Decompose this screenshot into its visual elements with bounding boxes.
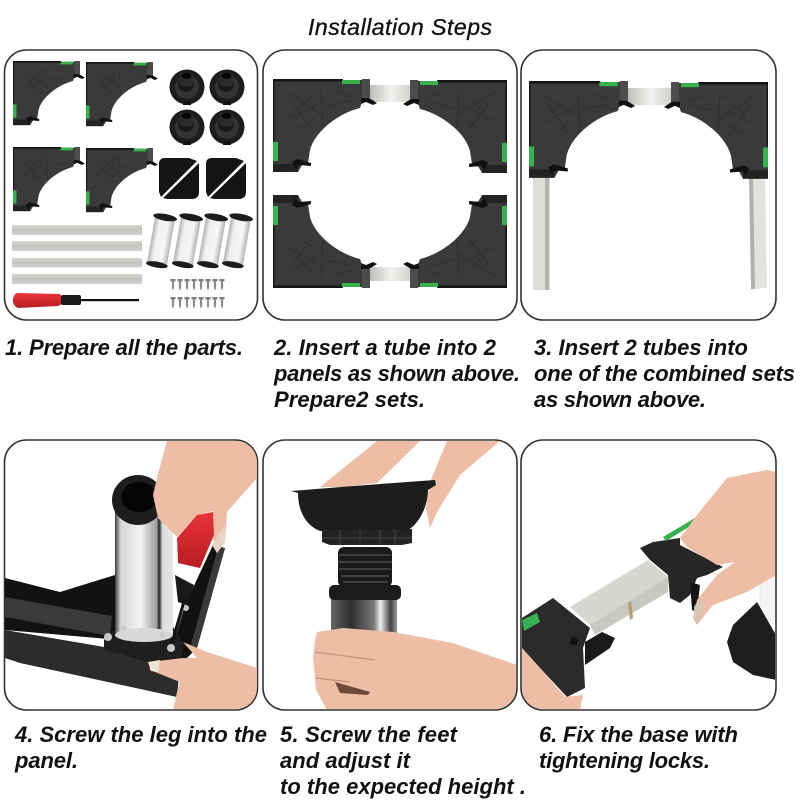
- collar and chrome tube: [329, 585, 401, 634]
- chrome tube: [112, 475, 173, 642]
- base panel: [5, 545, 225, 697]
- right clamp: [640, 518, 723, 612]
- screwdriver: [13, 293, 139, 308]
- foot and leg in background: [727, 576, 776, 680]
- step 2 caption: 2. Insert a tube into 2: [273, 335, 497, 360]
- feet: [170, 70, 244, 145]
- square tube: [570, 560, 668, 635]
- step 2 caption: panels as shown above.: [273, 361, 520, 386]
- step 6 caption: [539, 722, 738, 773]
- pads: [159, 158, 246, 199]
- step 6 caption: tightening locks.: [539, 748, 710, 773]
- step 3 caption: 3. Insert 2 tubes into: [534, 335, 748, 360]
- left hand: [522, 648, 583, 710]
- screws: [170, 279, 224, 308]
- step 5 caption: [280, 722, 526, 799]
- step 3 caption: as shown above.: [534, 387, 706, 412]
- step 5 caption: and adjust it: [280, 748, 412, 773]
- step 4 caption: [14, 722, 267, 773]
- tubes: [370, 85, 412, 281]
- leg cylinders: [144, 212, 254, 270]
- left clamp: [522, 598, 615, 697]
- lower hand: [148, 642, 257, 710]
- assembled corners: [273, 79, 507, 288]
- step 1 caption: 1. Prepare all the parts.: [5, 335, 243, 360]
- step 3 caption: [534, 335, 795, 412]
- step 3 caption: one of the combined sets: [534, 361, 795, 386]
- assembled corners: [529, 81, 768, 179]
- corner panels: [13, 61, 158, 212]
- hand holding screwdriver: [153, 440, 257, 643]
- step 2 caption: Prepare2 sets.: [274, 387, 425, 412]
- step 4 caption: 4. Screw the leg into the: [14, 722, 267, 747]
- step 4 caption: panel.: [14, 748, 78, 773]
- panel: step 4: [4, 440, 258, 710]
- step 5 caption: 5. Screw the feet: [280, 722, 459, 747]
- panel: step 5: [263, 440, 517, 710]
- step 2 caption: [273, 335, 520, 412]
- right hand: [680, 470, 776, 625]
- panel: step 3: [521, 50, 776, 320]
- step 5 caption: to the expected height .: [280, 774, 526, 799]
- step 6 caption: 6. Fix the base with: [539, 722, 738, 747]
- tube bars: [12, 225, 142, 284]
- bellows: [338, 547, 392, 587]
- foot bowl: [291, 480, 436, 545]
- hands above bowl: [320, 441, 500, 528]
- legs and tube: [533, 88, 767, 290]
- panel: step 1 parts: [4, 50, 258, 320]
- panel: step 2: [263, 50, 517, 320]
- title: Installation Steps: [308, 14, 492, 40]
- screws: [104, 605, 189, 652]
- hand holding tube: [313, 628, 517, 710]
- panel: step 6: [521, 440, 776, 710]
